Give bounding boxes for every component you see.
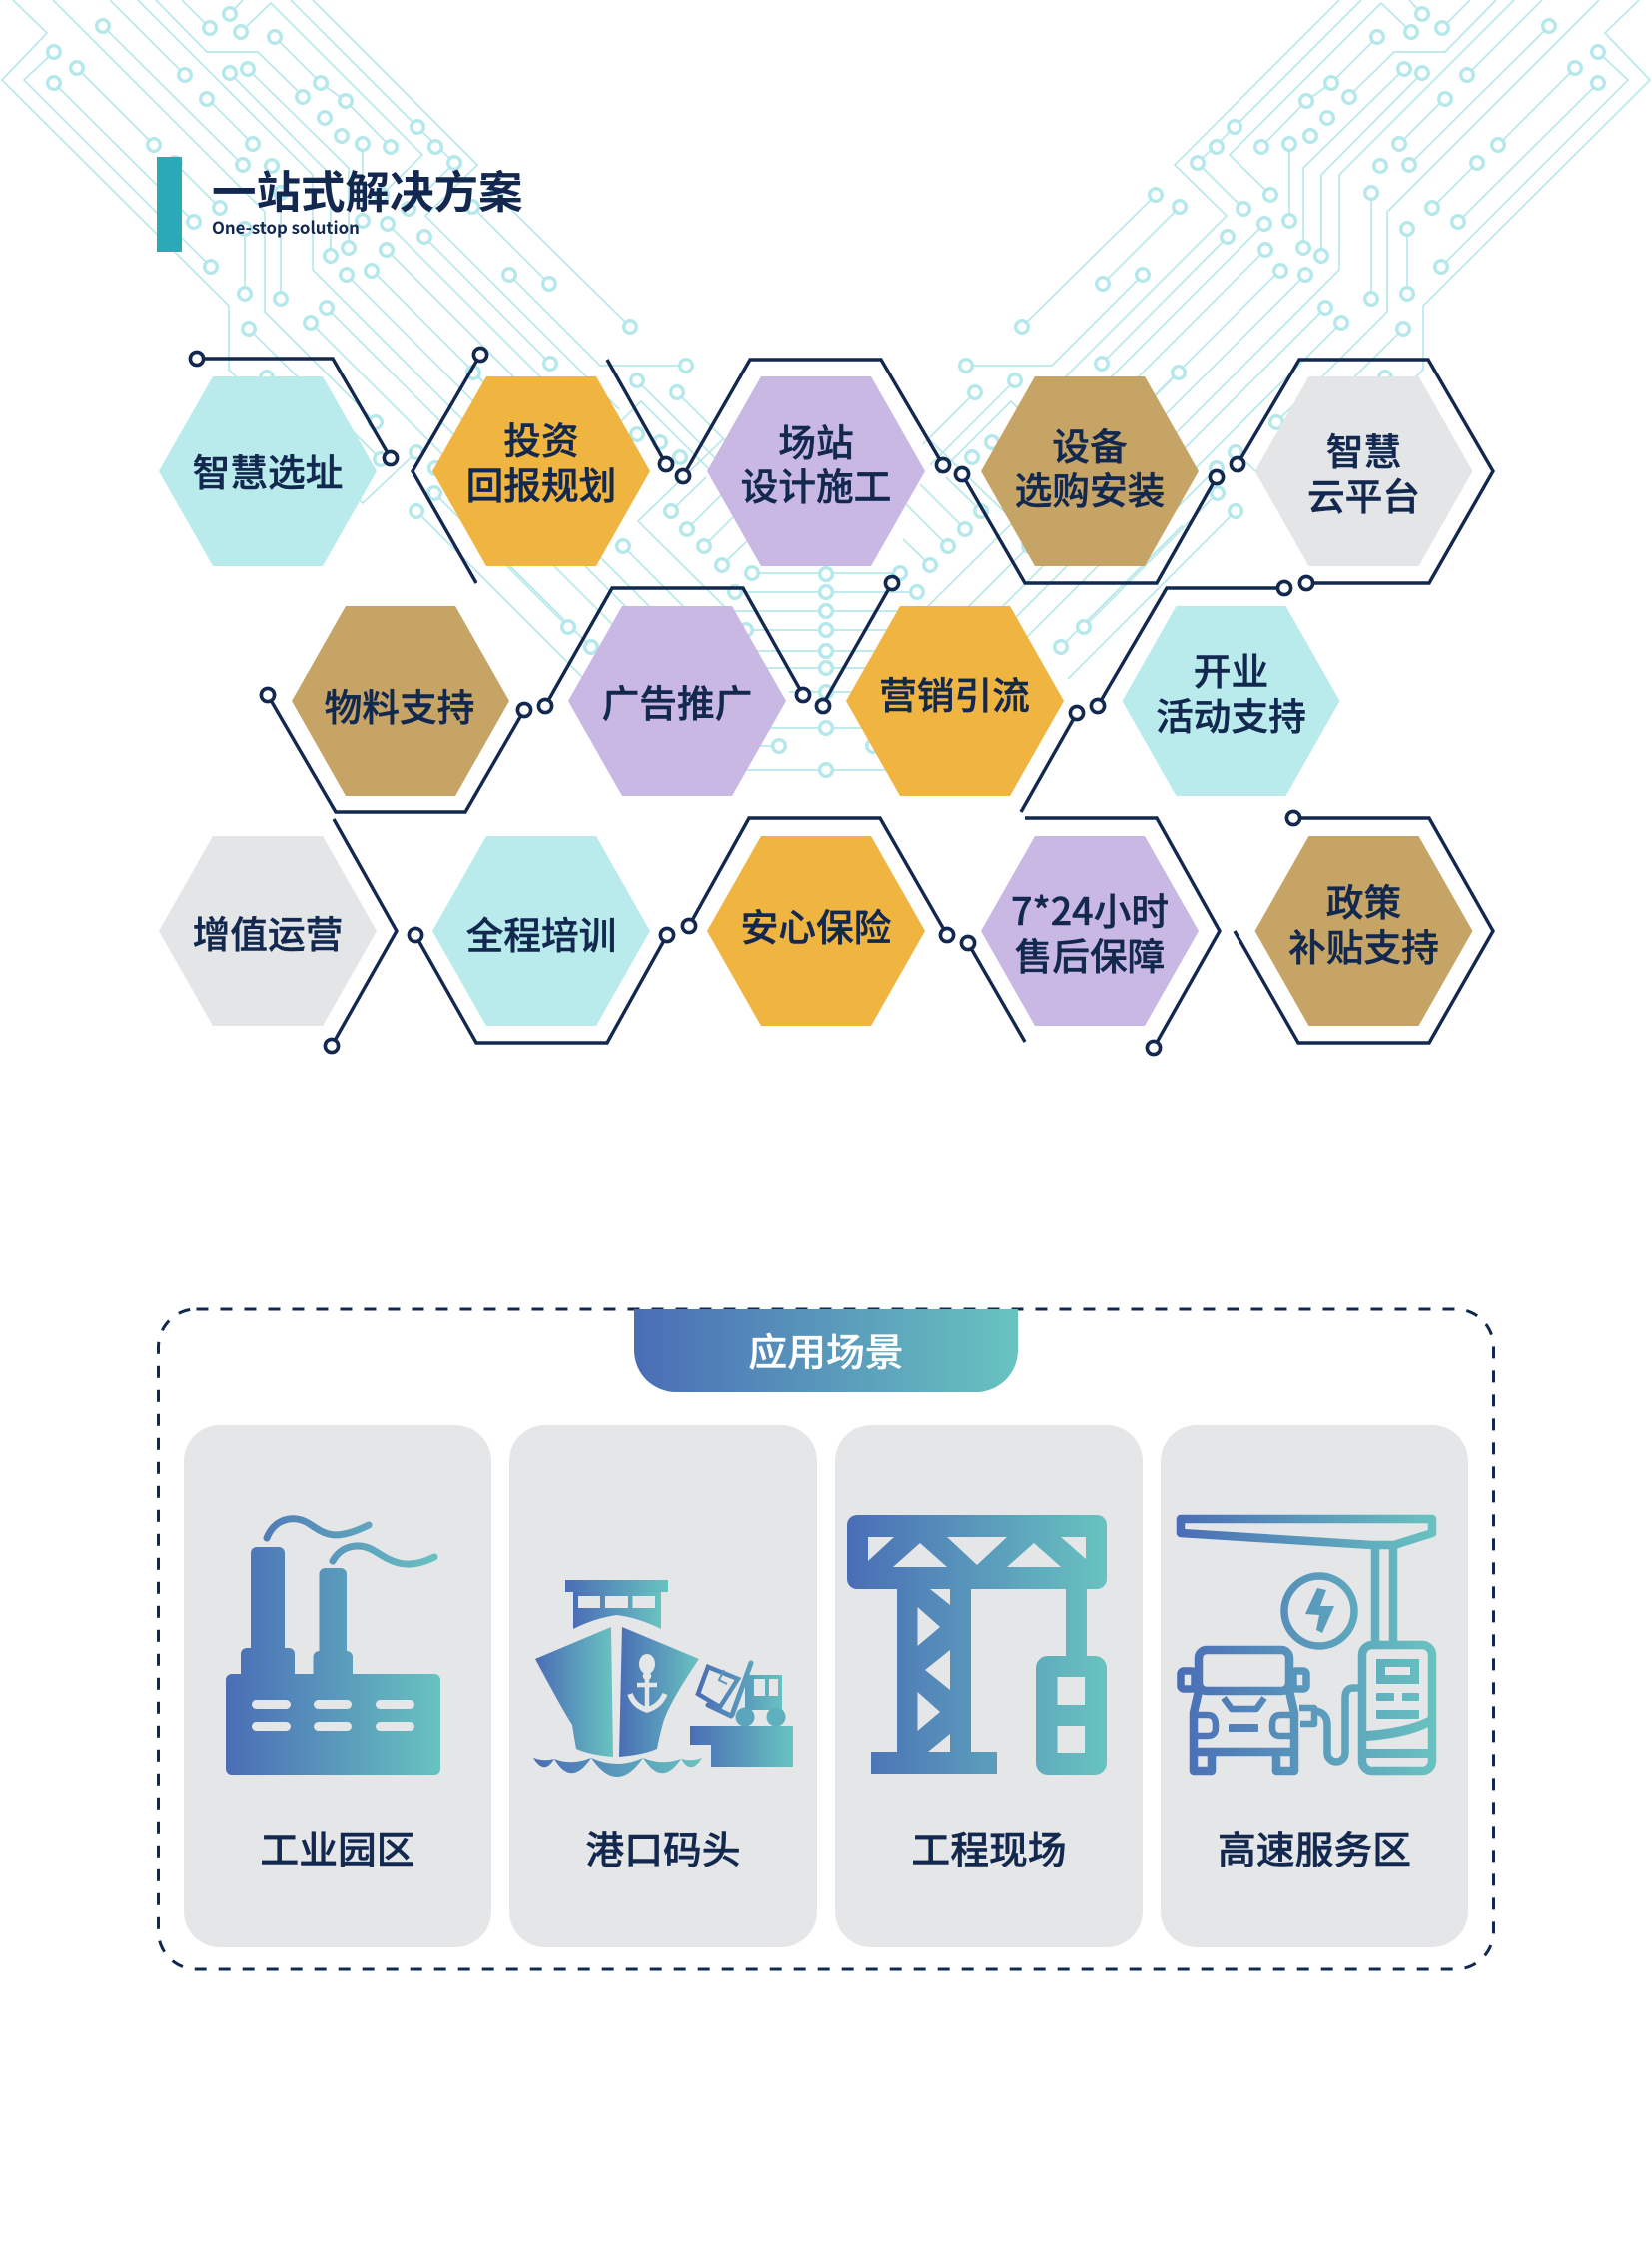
hexagon: 开业活动支持: 活动支持 (1156, 686, 1306, 741)
hexagon: 安心保险 (707, 836, 925, 1026)
hexagon: 7*24小时售后保障 (981, 836, 1199, 1026)
hexagon: 7*24小时售后保障: 售后保障 (1015, 926, 1165, 981)
hexagon: 设备选购安装 (981, 376, 1199, 566)
hexagon: 全程培训 (432, 836, 650, 1026)
hexagon: 营销引流: 营销引流 (879, 665, 1030, 720)
hexagon: 场站设计施工 (707, 376, 925, 566)
hexagon: 7*24小时售后保障: 7*24小时 (1011, 881, 1169, 936)
scenes header tab (634, 1309, 1018, 1392)
heading accent bar (157, 157, 182, 252)
hexagon: 增值运营 (159, 836, 377, 1026)
hexagon: 广告推广: 广告推广 (602, 673, 752, 728)
hexagon: 场站设计施工: 场站 (778, 412, 854, 467)
icon: ship and forklift (533, 1580, 793, 1777)
hexagon: 智慧云平台: 智慧 (1326, 421, 1401, 476)
hexagon: 投资回报规划: 回报规划 (466, 455, 616, 510)
hexagon: 设备选购安装: 选购安装 (1015, 460, 1165, 515)
hexagon: 投资回报规划 (432, 376, 650, 566)
title: 一站式解决方案 (212, 156, 523, 221)
hexagon: 智慧云平台 (1254, 376, 1472, 566)
scenes header tab: 应用场景 (748, 1322, 904, 1378)
hexagon: 设备选购安装: 设备 (1052, 416, 1128, 471)
card: 高速服务区 (1161, 1425, 1468, 1947)
hexagon: 广告推广 (568, 606, 786, 796)
subtitle: One-stop solution (212, 215, 360, 239)
hexagon outlines with connector dots (190, 348, 1493, 1055)
card: 港口码头 (509, 1425, 817, 1947)
hexagon: 智慧选址: 智慧选址 (193, 442, 343, 497)
hexagon: 营销引流 (846, 606, 1064, 796)
hexagon: 开业活动支持: 开业 (1194, 641, 1268, 696)
hexagon: 政策补贴支持: 政策 (1326, 872, 1401, 927)
hexagon: 场站设计施工: 设计施工 (741, 456, 891, 511)
hexagon: 物料支持 (292, 606, 509, 796)
hexagon: 智慧云平台: 云平台 (1307, 466, 1420, 521)
hexagon: 增值运营: 增值运营 (193, 904, 343, 959)
hexagon: 政策补贴支持: 补贴支持 (1288, 917, 1439, 972)
icon: EV charging station (1181, 1519, 1432, 1771)
label: 港口码头: 港口码头 (585, 1820, 741, 1875)
hexagon: 安心保险: 安心保险 (741, 897, 892, 952)
label: 工业园区: 工业园区 (260, 1820, 415, 1875)
hexagon: 开业活动支持 (1123, 606, 1340, 796)
background: circuit pattern (2, 0, 1650, 776)
hexagon: 智慧选址 (159, 376, 377, 566)
icon: factory (226, 1519, 440, 1775)
panel: application scenes frame (158, 1309, 1494, 1969)
card: 工业园区 (184, 1425, 491, 1947)
icon: tower crane (847, 1515, 1107, 1775)
hexagon: 全程培训: 全程培训 (466, 905, 616, 960)
hexagon: 投资回报规划: 投资 (503, 410, 579, 465)
hexagon: 物料支持: 物料支持 (325, 677, 474, 732)
hexagon: 政策补贴支持 (1254, 836, 1472, 1026)
label: 高速服务区: 高速服务区 (1218, 1820, 1411, 1875)
card: 工程现场 (835, 1425, 1143, 1947)
label: 工程现场: 工程现场 (911, 1820, 1067, 1875)
panel: hexagon grid (159, 376, 1472, 1026)
